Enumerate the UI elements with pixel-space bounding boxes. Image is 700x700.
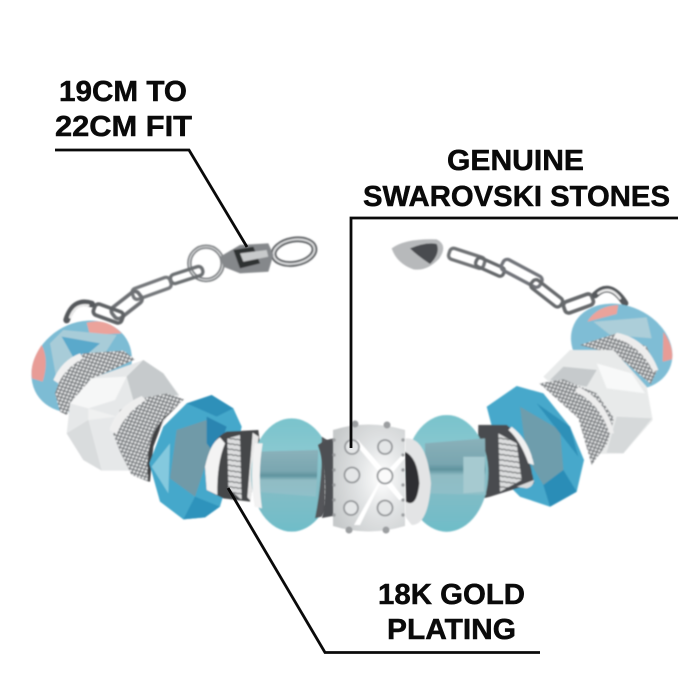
left white faceted bead [67, 360, 179, 471]
heading: 19cm to 22cm fit: 19CM TO [59, 76, 187, 108]
heading: genuine Swarovski stones: SWAROVSKI STONES [363, 181, 670, 213]
heart clasp and chain right [392, 239, 443, 270]
blue crystal bead left [149, 395, 242, 519]
bracelet photo [14, 236, 687, 533]
pave ring upper left [55, 351, 135, 415]
heading: genuine Swarovski stones [363, 145, 670, 213]
label: stones [351, 145, 678, 448]
metal collar beside center bead [318, 439, 338, 518]
heading: 18k gold plating: PLATING [387, 614, 516, 646]
label: plating [228, 488, 540, 652]
heading: 19cm to 22cm fit: 22CM FIT [55, 111, 192, 143]
blue crystal bead right [487, 386, 584, 507]
pink and blue glass bead [14, 302, 149, 431]
pave ring lower right [539, 379, 614, 465]
set stones [344, 440, 392, 516]
leader line to silver ring [228, 488, 540, 652]
left half of bracelet [14, 236, 337, 532]
label: fit [55, 76, 247, 247]
aqua bead right [405, 415, 488, 532]
silver ring right [477, 425, 534, 500]
pink and blue glass bead right [557, 288, 687, 406]
heading: genuine Swarovski stones: GENUINE [447, 145, 584, 177]
metal collar left [315, 437, 337, 518]
heading: 18k gold plating: 18K GOLD [378, 579, 525, 611]
center white bead [332, 420, 405, 534]
lobster clasp [220, 243, 273, 273]
metal collar right [405, 438, 431, 525]
heading: 19cm to 22cm fit [55, 76, 192, 143]
leader line to center bead [351, 218, 678, 448]
pave ring lower left [112, 393, 184, 482]
silver ring left [205, 430, 260, 502]
edge stones [332, 420, 405, 534]
leader line to clasp [55, 150, 247, 247]
aqua bead left [251, 418, 332, 532]
pave ring upper right [580, 333, 657, 384]
heading: 18k gold plating [378, 579, 525, 646]
right half of bracelet [392, 239, 687, 532]
right white faceted bead [543, 350, 653, 454]
clasp and chain left [67, 236, 316, 324]
